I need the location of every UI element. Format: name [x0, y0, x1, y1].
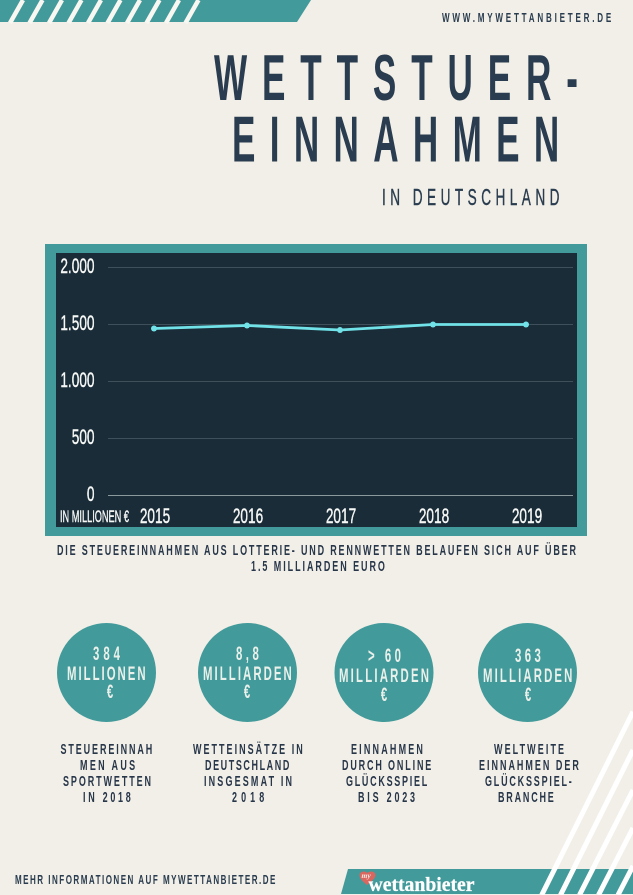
- data line: [151, 322, 529, 333]
- y axis labels: [60, 254, 95, 506]
- stat 3 description: [342, 741, 431, 806]
- stat 2 circle: €: [244, 682, 250, 703]
- x axis labels: 2016: [233, 504, 263, 528]
- stat 2 description: WETTEINSÄTZE IN: [193, 740, 303, 758]
- stat 4 description: [479, 741, 579, 806]
- logo: my: [362, 871, 371, 880]
- stat 4 description: GLÜCKSSPIEL-: [485, 772, 572, 790]
- stat 2 description: 2018: [232, 789, 264, 806]
- stat 4 circle: MILLIARDEN: [483, 666, 572, 687]
- stat 1 description: STEUEREINNAH: [60, 741, 152, 758]
- title: EINNAHMEN: [232, 104, 559, 176]
- stat 3 description: EINNAHMEN: [351, 741, 423, 758]
- stat 4 description: BRANCHE: [498, 789, 554, 806]
- stat 1 description: SPORTWETTEN: [63, 773, 151, 790]
- stat 1 circle: MILLIONEN: [67, 664, 146, 685]
- stat 3 circle: MILLIARDEN: [339, 666, 429, 687]
- y axis labels: 0: [87, 482, 95, 506]
- stat 3 description: DURCH ONLINE: [342, 757, 431, 774]
- stat 1 circle: €: [107, 682, 113, 703]
- y axis labels: 2.000: [60, 254, 95, 278]
- footer banner: [341, 869, 633, 894]
- stat 4 circle: [478, 623, 577, 722]
- stat 4 circle: 363: [515, 646, 541, 667]
- stat 3 circle: €: [381, 685, 387, 706]
- x axis labels: 2018: [419, 504, 449, 528]
- footer text: MEHR INFORMATIONEN AUF MYWETTANBIETER.DE: [15, 873, 275, 888]
- x axis labels: 2015: [140, 504, 170, 528]
- stat 3 description: GLÜCKSSPIEL: [346, 772, 427, 790]
- stat 2 circle: [198, 623, 297, 722]
- chart caption: 1.5 MILLIARDEN EURO: [251, 558, 385, 575]
- website url: WWW.MYWETTANBIETER.DE: [442, 11, 611, 26]
- stat 2 description: DEUTSCHLAND: [205, 757, 290, 774]
- stat 1 description: [60, 741, 152, 806]
- stat 4 description: WELTWEITE: [494, 741, 564, 758]
- x axis labels: 2017: [326, 504, 356, 528]
- chart caption: DIE STEUEREINNAHMEN AUS LOTTERIE- UND RENNWETTEN BELAUFEN SICH AUF ÜBER: [57, 541, 576, 559]
- subtitle: IN DEUTSCHLAND: [382, 185, 559, 211]
- y axis labels: 500: [72, 425, 95, 449]
- diagonal stripes: [542, 712, 633, 895]
- y axis labels: 1.000: [60, 368, 95, 392]
- stat 4 circle: €: [525, 685, 531, 706]
- stat 2 circle: 8,8: [236, 644, 259, 665]
- stat 3 description: BIS 2023: [358, 789, 415, 806]
- x axis labels: 2019: [512, 504, 542, 528]
- stat 1 description: MEN AUS: [80, 757, 135, 774]
- chart caption: [57, 541, 576, 575]
- y axis labels: 1.500: [60, 311, 95, 335]
- stat 2 circle: MILLIARDEN: [203, 664, 292, 685]
- stat 1 circle: 384: [93, 644, 120, 665]
- title: [214, 43, 578, 176]
- stat 2 description: [193, 740, 303, 806]
- panel: line chart: [45, 244, 587, 536]
- stat 4 description: EINNAHMEN DER: [479, 757, 579, 774]
- top striped banner: [0, 0, 311, 23]
- stat 3 circle: > 60: [368, 646, 401, 667]
- title: WETTSTUER-: [214, 43, 578, 115]
- stat 1 circle: [57, 623, 156, 722]
- x axis labels: [140, 504, 542, 528]
- stat 1 description: IN 2018: [83, 789, 131, 806]
- stat 2 description: INSGESMAT IN: [204, 773, 292, 790]
- stat 3 circle: [334, 623, 434, 722]
- unit label: IN MILLIONEN €: [60, 507, 129, 526]
